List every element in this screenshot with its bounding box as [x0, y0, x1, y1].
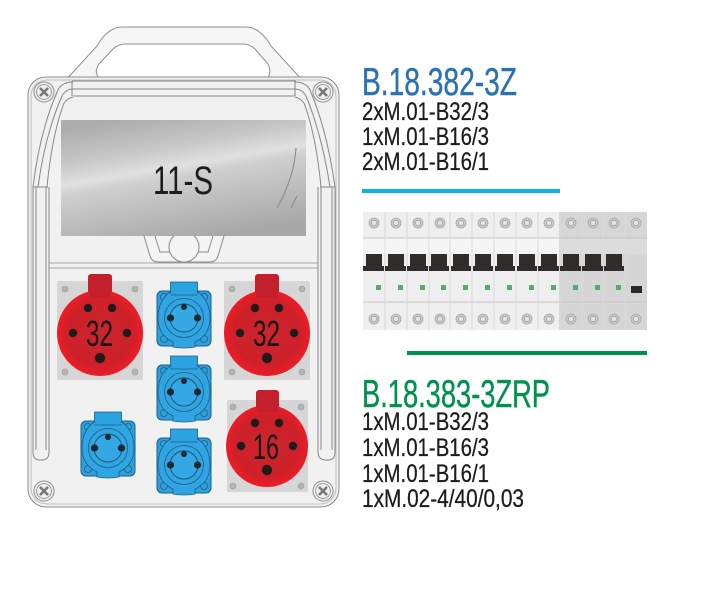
heading: B.18.383-3ZRP: B.18.383-3ZRP	[362, 373, 550, 416]
blue socket middle	[157, 356, 211, 422]
window label: 11-S	[153, 159, 213, 203]
component list 1: 2xM.01-B16/1	[362, 148, 489, 176]
component list 1	[362, 98, 489, 176]
terminal screws bottom	[369, 314, 641, 324]
window	[61, 120, 306, 236]
cyan rule	[362, 189, 560, 193]
component list 2: 1xM.01-B16/3	[362, 434, 489, 462]
red socket 16	[226, 390, 308, 492]
red socket 32 left: 32	[86, 313, 113, 354]
red socket 32 left	[57, 274, 143, 380]
component list 2: 1xM.01-B32/3	[362, 408, 489, 436]
black indicator	[631, 286, 642, 293]
component list 1: 1xM.01-B16/3	[362, 123, 489, 151]
handle	[64, 27, 304, 82]
housing body	[28, 77, 339, 507]
latch	[144, 232, 224, 262]
red socket 16: 16	[253, 428, 279, 467]
component list 1: 2xM.01-B32/3	[362, 98, 489, 126]
lid outline	[33, 81, 335, 460]
heading: B.18.382-3Z: B.18.382-3Z	[362, 61, 517, 104]
enclosure with handle	[28, 27, 339, 507]
component list 2	[362, 408, 524, 513]
screws	[34, 82, 333, 501]
breaker toggles	[363, 254, 624, 271]
breaker row	[363, 212, 647, 330]
component list 2: 1xM.01-B16/1	[362, 460, 489, 488]
green indicators	[376, 285, 621, 290]
handle opening	[96, 44, 270, 81]
blue socket bottom	[157, 429, 211, 495]
blue socket left	[81, 412, 135, 478]
red socket 32 right	[224, 274, 310, 380]
blue socket top	[157, 282, 211, 348]
green rule	[407, 351, 647, 355]
red socket 32 right: 32	[253, 313, 280, 354]
terminal screws top	[369, 218, 641, 228]
component list 2: 1xM.02-4/40/0,03	[362, 485, 524, 513]
